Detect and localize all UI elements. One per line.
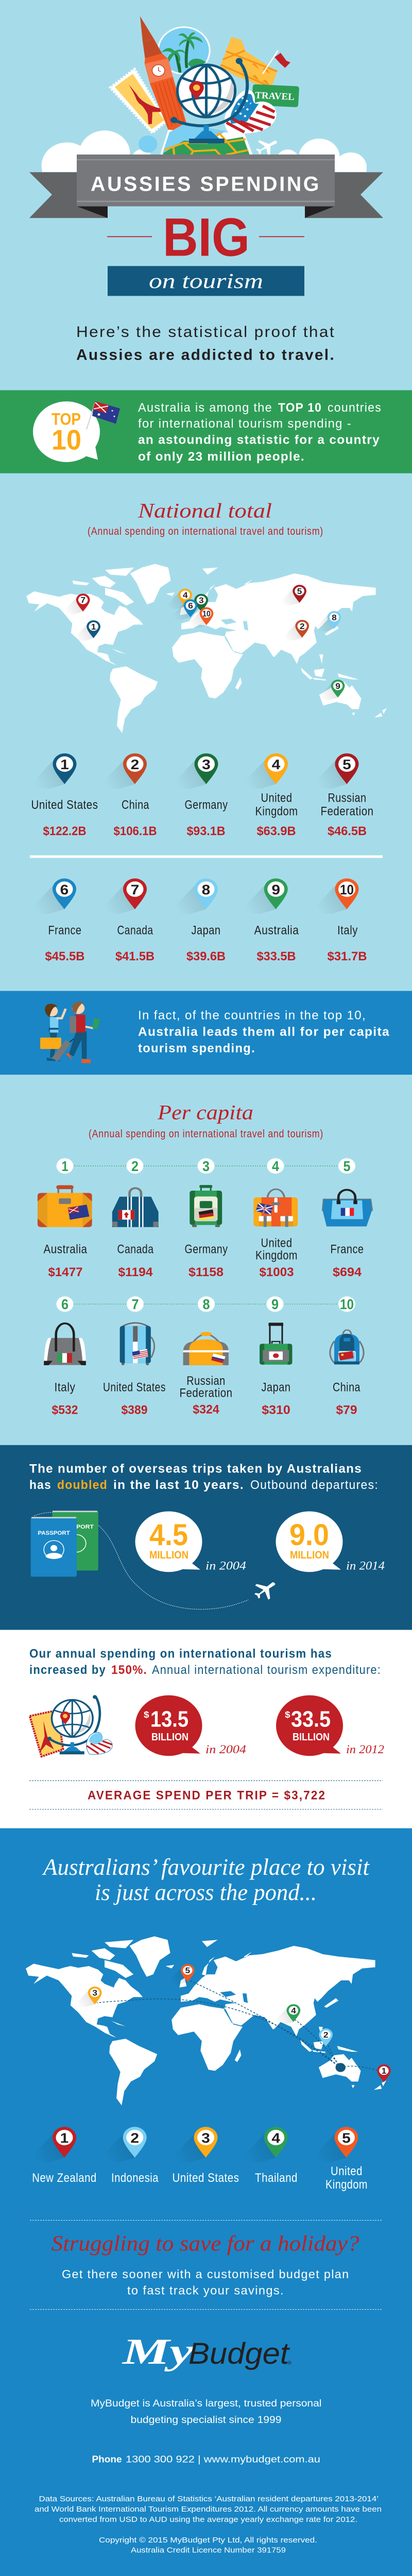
average spend callout: AVERAGE SPEND PER TRIP = $3,722: [88, 1789, 326, 1802]
favourite destinations legend: 2: [130, 2130, 139, 2146]
top 10 text: an astounding statistic for a country: [138, 433, 380, 447]
rank 10 Italy: Italy: [337, 923, 358, 937]
icon: passports and flight path: [31, 1511, 281, 1609]
trips heading: The number of overseas trips taken by Australians: [29, 1462, 362, 1476]
spending heading: Our annual spending on international tourism has: [29, 1647, 332, 1660]
per capita rank line 1: 1: [62, 1158, 68, 1175]
icon: United States suitcase: [120, 1323, 154, 1365]
callout text: tourism spending.: [138, 1042, 255, 1055]
per capita names and values row 2: United States: [103, 1381, 166, 1394]
travel ticket: TRAVEL: [255, 90, 295, 103]
title ribbon: [29, 155, 383, 218]
data sources: and World Bank International Tourism Expenditures 2012. All currency amounts have been: [35, 2505, 382, 2514]
map pins: 2: [323, 2030, 329, 2040]
map pins: 9: [335, 682, 340, 691]
map pins: 1: [91, 622, 96, 632]
top 10 text: Australia is among the: [138, 401, 272, 415]
trips heading: doubled: [57, 1478, 108, 1492]
per capita rank line 2: 8: [203, 1297, 210, 1313]
map pins: 4: [183, 590, 188, 600]
world map: favourite destinations: [26, 1936, 391, 2106]
world map: national total: [26, 564, 387, 733]
MyBudget logo: Budget: [188, 2337, 290, 2370]
icon: Australian flag: [87, 401, 120, 429]
callout text: Australia leads them all for per capita: [138, 1025, 390, 1039]
data sources: Data Sources: Australian Bureau of Statistics ‘Australian resident departures 2013-2014’: [39, 2495, 379, 2503]
rank 1 United States: [28, 753, 98, 838]
icon: Italy handbag: [44, 1324, 86, 1365]
top 10 text: [138, 401, 382, 464]
rank 7 Canada: 7: [131, 882, 139, 897]
intro text: Aussies are addicted to travel.: [76, 346, 335, 363]
data sources: converted from USD to AUD using the average yearly exchange rate for 2012.: [59, 2516, 357, 2524]
contact line: 1300 300 922 | www.mybudget.com.au: [126, 2454, 320, 2465]
per capita names and values row 1: [43, 1236, 364, 1279]
call to action: [30, 2221, 383, 2310]
bubble: 9.0 million in 2014: MILLION: [290, 1549, 329, 1561]
rank 10 Italy: 10: [340, 882, 354, 897]
flight routes: [97, 1981, 384, 2072]
rank 4 United Kingdom: Kingdom: [255, 805, 298, 818]
rank 2 China: [98, 753, 157, 838]
heading banner: on tourism: [108, 266, 304, 296]
luggage row 1: [38, 1185, 372, 1227]
heading: per capita: [89, 1101, 323, 1140]
rank 1 United States: $122.2B: [43, 824, 87, 838]
company description: [91, 2398, 321, 2426]
intro text: Here’s the statistical proof that: [76, 324, 335, 341]
map pins: [73, 1964, 391, 2082]
favourite destinations legend: 4: [271, 2130, 280, 2146]
MyBudget logo: ®: [287, 2361, 291, 2366]
icon: Canada bag: [112, 1188, 159, 1227]
rank 3 Germany: Germany: [184, 798, 228, 812]
spending heading: 150%.: [111, 1663, 147, 1676]
call to action: to fast track your savings.: [127, 2284, 284, 2297]
per capita names and values row 2: Italy: [55, 1381, 75, 1394]
per capita rank line 2: 6: [61, 1297, 68, 1313]
rank 8 Japan: Japan: [191, 923, 220, 937]
rank 6 France: $45.5B: [45, 950, 85, 963]
favourite heading: [42, 1854, 370, 1906]
bubble: 4.5 million in 2004: [135, 1512, 246, 1572]
rank 6 France: 6: [60, 882, 68, 897]
rank 4 United Kingdom: $63.9B: [256, 824, 296, 838]
icon: globe stamp and heart: [30, 1695, 112, 1756]
favourite destinations legend: United: [331, 2164, 363, 2178]
rank 9 Australia: Australia: [254, 923, 299, 937]
trips heading: Outbound departures:: [250, 1478, 379, 1492]
trips heading: has: [29, 1478, 52, 1492]
panel: overseas trips: [0, 1445, 412, 1630]
map pins: 7: [80, 596, 85, 605]
rank 3 Germany: $93.1B: [186, 824, 225, 838]
per capita names and values row 2: $310: [262, 1403, 290, 1417]
callout text: In fact, of the countries in the top 10,: [138, 1009, 366, 1022]
bubble: 13.5 billion in 2004: [135, 1695, 246, 1756]
icon: Russia duffel: [183, 1332, 229, 1365]
icon: top 10 speech bubble: [33, 401, 100, 462]
icon: China backpack: [330, 1330, 364, 1364]
rank 6 France: France: [48, 923, 81, 937]
bubble: 33.5 billion in 2012: in 2012: [346, 1743, 384, 1756]
per capita names and values row 2: China: [333, 1381, 360, 1394]
favourite destinations legend: United States: [172, 2171, 239, 2185]
icon: Germany suitcase: [190, 1185, 222, 1227]
bubble: 33.5 billion in 2012: [276, 1695, 384, 1756]
rank 4 United Kingdom: [239, 753, 298, 838]
favourite destinations legend: Thailand: [255, 2171, 298, 2185]
trips heading: [29, 1462, 379, 1492]
favourite heading: is just across the pond...: [95, 1879, 317, 1906]
bubble: 33.5 billion in 2012: BILLION: [293, 1732, 330, 1743]
rank 8 Japan: $39.6B: [186, 950, 226, 963]
per capita rank line 1: 3: [202, 1158, 210, 1175]
bubble: 4.5 million in 2004: 4.5: [149, 1518, 188, 1552]
heading BIG: BIG: [163, 207, 250, 267]
title text: AUSSIES SPENDING: [91, 172, 321, 195]
per capita names and values row 1: $694: [333, 1265, 362, 1279]
globe: [170, 58, 247, 143]
bubble: 4.5 million in 2004: MILLION: [149, 1549, 188, 1561]
per capita rank line 1: [57, 1158, 355, 1175]
per capita names and values row 2: [52, 1374, 360, 1417]
blue seal: [139, 135, 158, 152]
national ranking row 1: [28, 753, 373, 838]
spending heading: increased by: [29, 1663, 106, 1676]
map pins: 1: [382, 2066, 386, 2076]
icon: top 10 speech bubble: TOP: [52, 410, 81, 429]
hero illustration: [42, 16, 367, 189]
bubble: 13.5 billion in 2004: $: [144, 1710, 149, 1720]
rank 9 Australia: $33.5B: [256, 950, 296, 963]
per capita names and values row 1: United: [261, 1236, 292, 1250]
company description: MyBudget is Australia’s largest, trusted personal: [91, 2398, 321, 2409]
rank 4 United Kingdom: United: [261, 791, 292, 805]
favourite destinations legend: New Zealand: [32, 2171, 97, 2185]
stamp with Eiffel tower: [110, 69, 166, 133]
data sources: [35, 2495, 382, 2524]
rank 7 Canada: Canada: [117, 923, 153, 937]
icon: Australia suitcase: [38, 1185, 92, 1227]
map pins: 2: [300, 622, 305, 631]
rank 7 Canada: [98, 878, 154, 963]
icon: travellers: [40, 1002, 100, 1063]
map pins: [61, 585, 345, 700]
top 10 text: countries: [328, 401, 382, 415]
heart with US flag: [225, 90, 277, 133]
rank 9 Australia: [239, 878, 299, 963]
heading banner: on tourism: on tourism: [149, 269, 263, 293]
map pins: 5: [185, 1966, 190, 1975]
icon: passports and flight path: PORT: [76, 1524, 94, 1530]
call to action: Struggling to save for a holiday?: [52, 2231, 359, 2256]
intro text: [76, 324, 335, 363]
rank 1 United States: 1: [60, 757, 69, 773]
per capita rank line 2: 7: [132, 1297, 139, 1313]
per capita rank line 2: 9: [271, 1297, 279, 1313]
top 10 text: for international tourism spending -: [138, 417, 352, 431]
bubble: 13.5 billion in 2004: in 2004: [205, 1743, 246, 1756]
heading: per capita: Per capita: [157, 1101, 253, 1124]
MyBudget logo: My: [122, 2332, 194, 2372]
icon: top 10 speech bubble: 10: [52, 425, 81, 456]
rank 5 Russian Federation: Federation: [320, 805, 373, 818]
rank 10 Italy: [310, 878, 367, 963]
panel: top 10: [0, 390, 412, 473]
heading: per capita: (Annual spending on international travel and tourism): [89, 1127, 323, 1140]
bubble: 33.5 billion in 2012: $: [285, 1710, 290, 1720]
per capita names and values row 1: $1477: [48, 1265, 82, 1279]
heading: national total: (Annual spending on international travel and tourism): [88, 525, 323, 537]
rank 2 China: $106.1B: [113, 824, 157, 838]
rank 7 Canada: $41.5B: [115, 950, 154, 963]
rank 8 Japan: [169, 878, 226, 963]
rank 4 United Kingdom: 4: [272, 757, 280, 773]
top 10 text: of only 23 million people.: [138, 450, 305, 464]
MyBudget logo: [122, 2332, 291, 2372]
bubble: 13.5 billion in 2004: 13.5: [150, 1707, 188, 1732]
per capita names and values row 1: $1158: [188, 1265, 224, 1279]
panel: annual spending: [0, 1630, 412, 1828]
per capita names and values row 2: Russian: [186, 1374, 226, 1388]
Colosseum: [220, 37, 277, 89]
bubble: 13.5 billion in 2004: BILLION: [151, 1732, 188, 1743]
bubble: 33.5 billion in 2012: 33.5: [291, 1707, 331, 1732]
per capita names and values row 2: $324: [193, 1403, 219, 1416]
company description: budgeting specialist since 1999: [131, 2415, 281, 2426]
rank 9 Australia: 9: [271, 882, 280, 897]
favourite destinations legend: 3: [201, 2130, 210, 2146]
trips heading: in the last 10 years.: [113, 1478, 244, 1492]
copyright: Australia Credit Licence Number 391759: [131, 2546, 286, 2554]
panel: per capita callout: [0, 991, 412, 1075]
rank 3 Germany: 3: [202, 757, 211, 773]
per capita rank line 1: 2: [131, 1158, 139, 1175]
Big Ben: [140, 16, 188, 135]
national ranking row 2: [27, 878, 367, 963]
copyright: [99, 2536, 317, 2554]
per capita names and values row 1: Germany: [184, 1243, 228, 1256]
per capita rank line 1: 5: [343, 1158, 350, 1175]
per capita rank line 2: [57, 1296, 355, 1313]
favourite destinations legend: Kingdom: [325, 2178, 368, 2192]
call to action: Get there sooner with a customised budget plan: [62, 2268, 349, 2281]
favourite destinations legend: [27, 2127, 368, 2192]
bubble: 9.0 million in 2014: in 2014: [346, 1560, 385, 1572]
per capita names and values row 2: $79: [336, 1403, 357, 1417]
rank 10 Italy: $31.7B: [328, 950, 367, 963]
per capita names and values row 2: $389: [122, 1403, 148, 1417]
per capita names and values row 2: Japan: [262, 1381, 291, 1394]
per capita names and values row 1: France: [330, 1243, 364, 1256]
map sheet: [157, 124, 256, 165]
favourite destinations legend: 5: [342, 2130, 351, 2146]
favourite destinations legend: 1: [60, 2130, 68, 2146]
travel ticket: [252, 84, 299, 107]
bubble: 9.0 million in 2014: 9.0: [289, 1518, 329, 1552]
per capita names and values row 1: Kingdom: [255, 1248, 298, 1262]
favourite destinations legend: Indonesia: [111, 2171, 159, 2185]
rank 5 Russian Federation: $46.5B: [328, 824, 367, 838]
clouds: [41, 130, 367, 172]
heading: national total: [88, 500, 323, 537]
icon: France bag: [323, 1190, 372, 1227]
rank 2 China: 2: [131, 757, 139, 773]
per capita names and values row 2: $532: [52, 1403, 78, 1417]
favourite heading: Australians’ favourite place to visit: [42, 1854, 370, 1880]
per capita names and values row 1: Canada: [117, 1243, 154, 1256]
icon: Japan trolley: [260, 1323, 292, 1365]
copyright: Copyright © 2015 MyBudget Pty Ltd, All rights reserved.: [99, 2536, 317, 2545]
icon: passports and flight path: PASSPORT: [38, 1530, 70, 1536]
per capita names and values row 2: Federation: [179, 1386, 232, 1400]
rank 5 Russian Federation: [310, 753, 373, 838]
rank 1 United States: United States: [31, 798, 98, 812]
rank 6 France: [27, 878, 85, 963]
bubble: 9.0 million in 2014: [276, 1512, 385, 1572]
per capita rank line 2: 10: [340, 1297, 354, 1313]
rank 3 Germany: [169, 753, 228, 838]
map pins: 5: [297, 587, 302, 596]
bubble: 4.5 million in 2004: in 2004: [205, 1560, 246, 1572]
contact line: Phone: [92, 2454, 122, 2465]
map pins: 3: [199, 596, 204, 605]
per capita names and values row 1: $1003: [260, 1265, 294, 1279]
heading: national total: National total: [138, 500, 272, 522]
per capita rank line 1: 4: [272, 1158, 279, 1175]
Australia origin dot: [336, 2063, 346, 2072]
rank 5 Russian Federation: Russian: [328, 791, 366, 805]
icon: UK bag: [253, 1189, 298, 1227]
map pins: 3: [92, 1988, 97, 1997]
rank 8 Japan: 8: [202, 882, 210, 897]
per capita names and values row 1: $1194: [118, 1265, 153, 1279]
map pins: 6: [188, 601, 193, 611]
map pins: 8: [332, 613, 337, 622]
map pins: 10: [202, 609, 211, 618]
luggage row 2: [44, 1323, 364, 1365]
callout text: [138, 1009, 390, 1055]
rank 2 China: China: [122, 798, 149, 812]
spending heading: [29, 1647, 381, 1676]
rank 5 Russian Federation: 5: [342, 757, 351, 773]
palm picture: [158, 27, 210, 74]
red flag: [263, 50, 290, 74]
per capita names and values row 1: Australia: [43, 1243, 88, 1256]
small plane: [252, 133, 282, 160]
map pins: 4: [291, 2006, 297, 2015]
top 10 text: TOP 10: [278, 401, 322, 415]
panel: favourite place and footer: [0, 1828, 412, 2576]
